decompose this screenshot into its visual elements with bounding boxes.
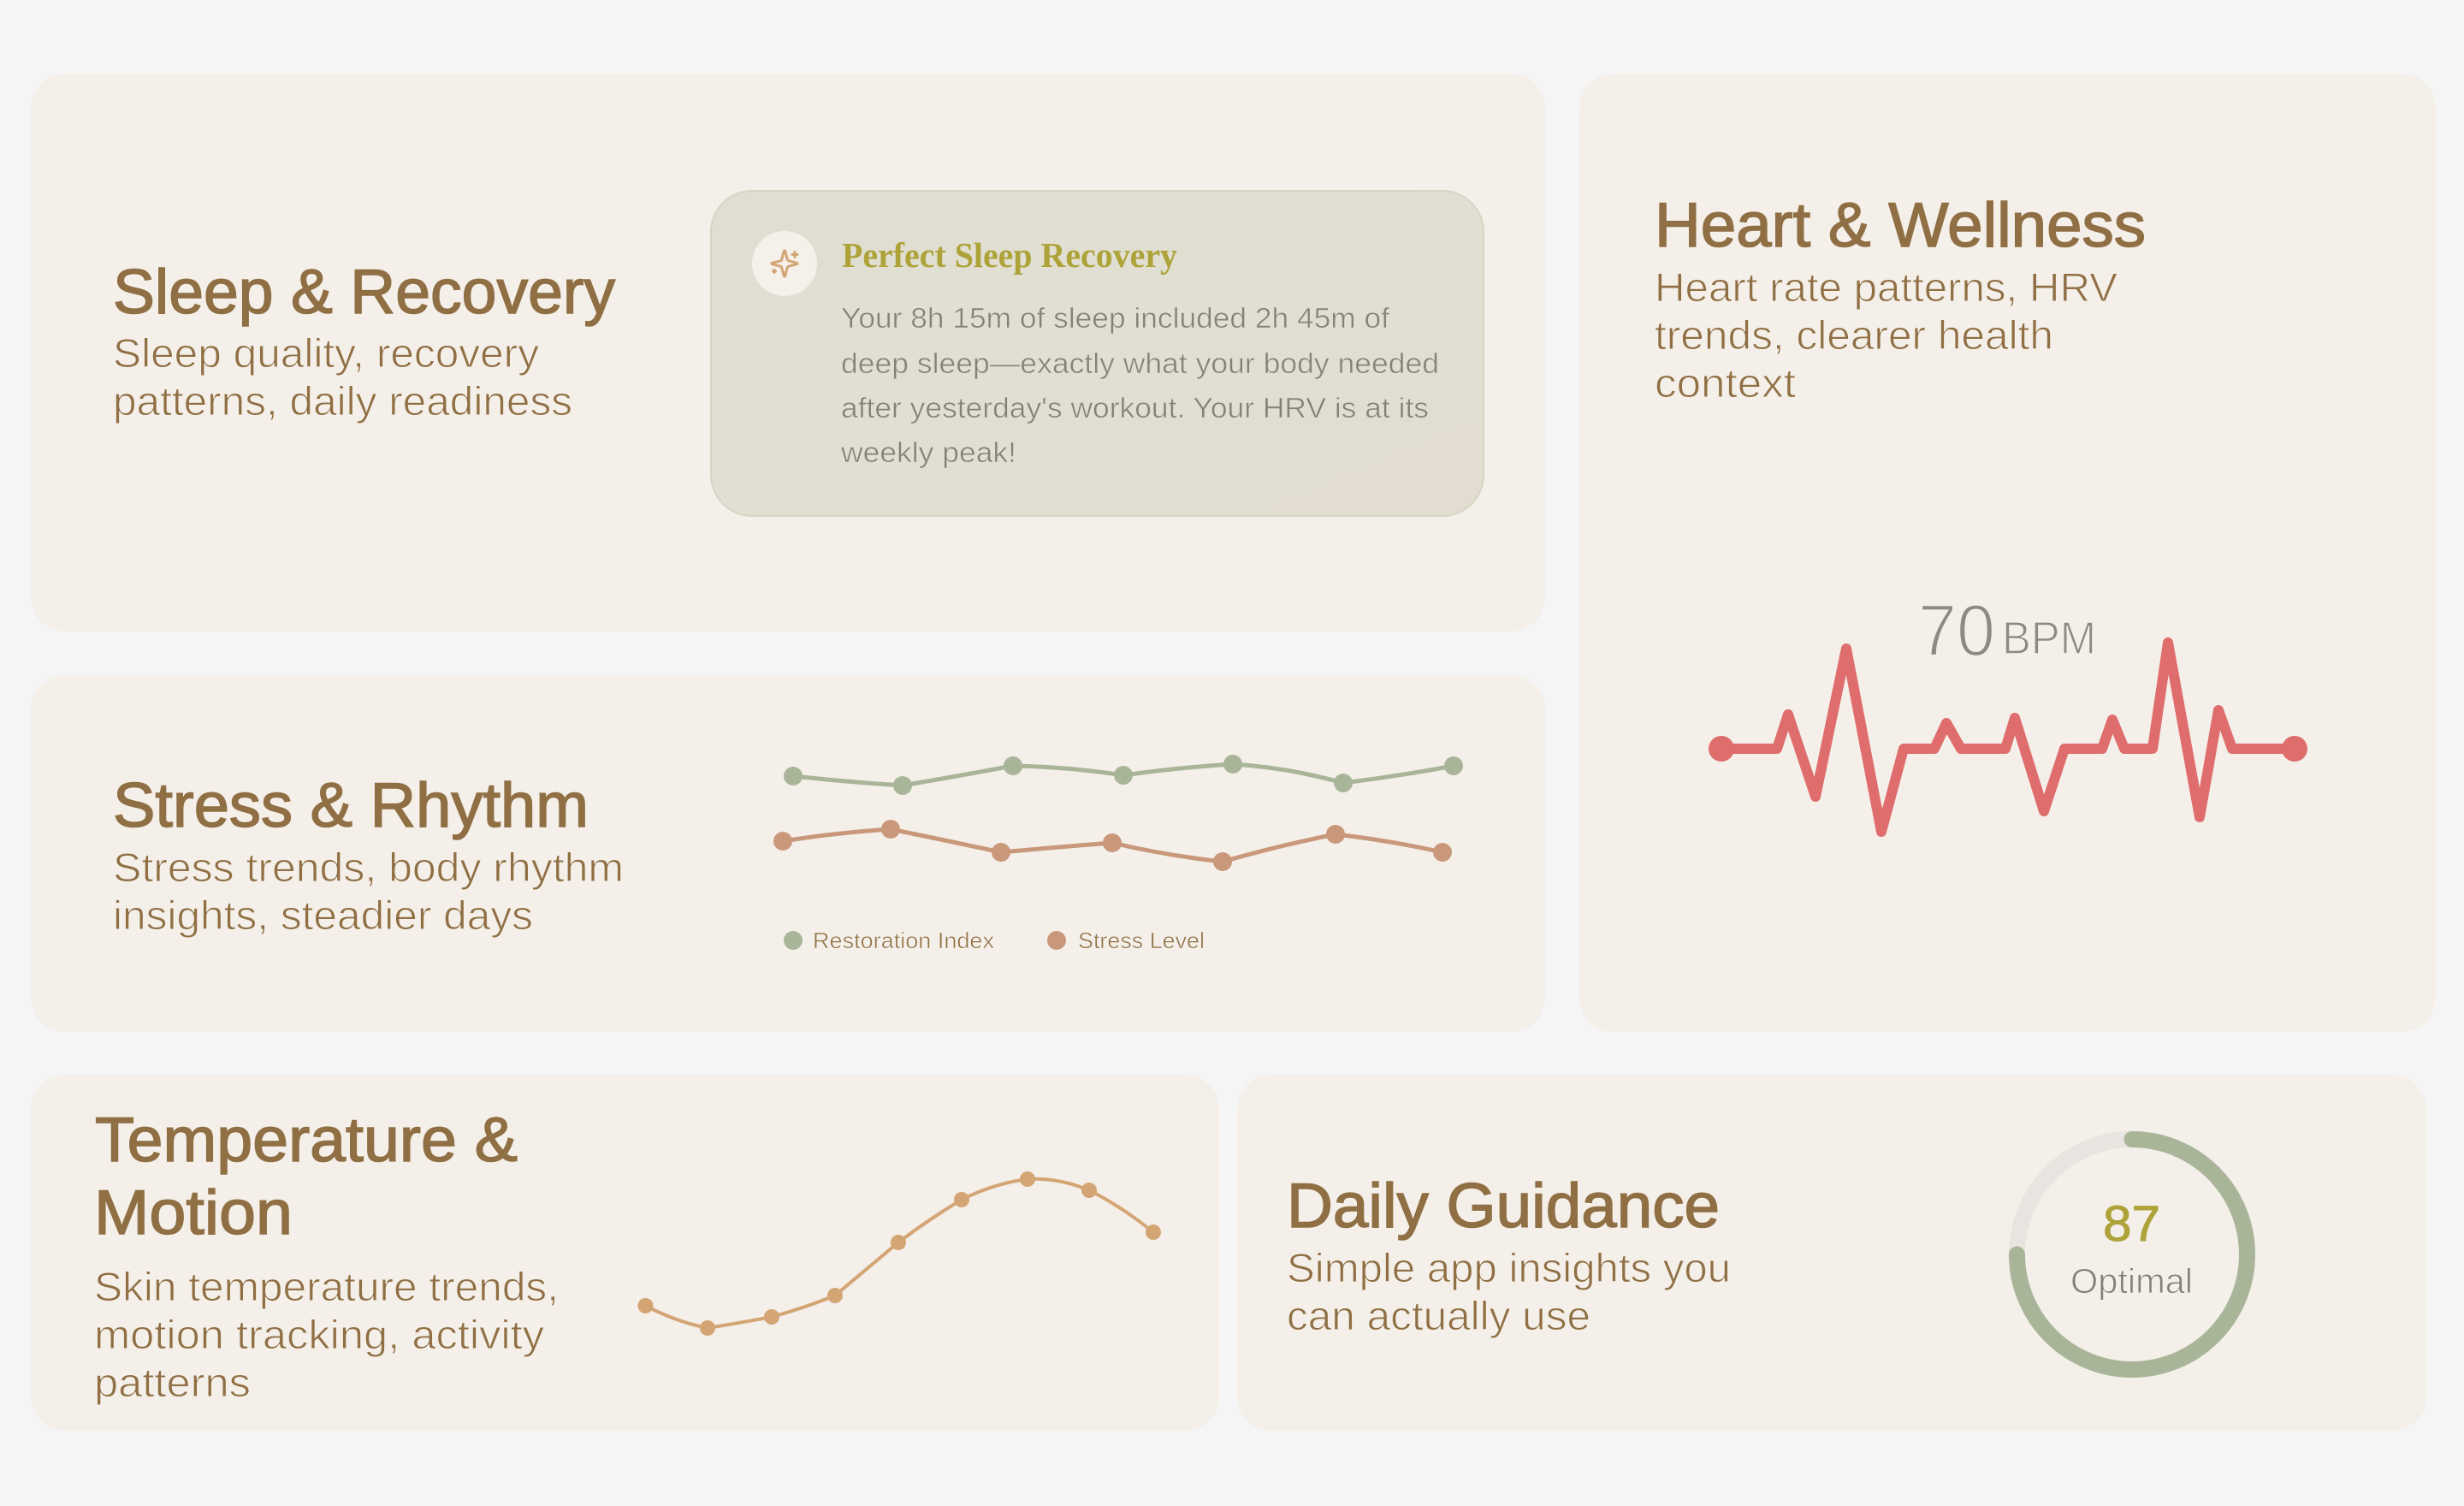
text: daily description: [1287, 1245, 1731, 1338]
callout body text: Your 8h 15m of sleep included 2h 45m of: [841, 302, 1390, 334]
text: temperature description: [94, 1264, 559, 1405]
text: heart description: trends, clearer health: [1655, 312, 2053, 358]
callout body text: weekly peak!: [840, 436, 1016, 468]
heading: heart and wellness: Heart & Wellness: [1655, 191, 2146, 260]
text: temperature description: patterns: [94, 1360, 251, 1405]
text: heart description: Heart rate patterns, HRV: [1655, 264, 2118, 310]
text: daily description: can actually use: [1287, 1293, 1590, 1338]
heading: temperature and motion: Temperature &: [95, 1106, 518, 1175]
chart: heartbeat line: [1709, 643, 2307, 832]
panel: temperature and motion: [31, 1075, 1219, 1431]
text: heart description: context: [1655, 360, 1796, 406]
text: stress description: [113, 845, 624, 938]
heading: sleep and recovery: Sleep & Recovery: [113, 258, 615, 327]
panel: stress and rhythm: [31, 675, 1545, 1032]
text: heart description: [1655, 264, 2118, 406]
line chart: temperature trend: [638, 1171, 1161, 1336]
callout body text: deep sleep—exactly what your body needed: [841, 347, 1439, 379]
text: sleep description: [113, 330, 572, 424]
text: daily description: Simple app insights you: [1287, 1245, 1731, 1290]
heading: temperature and motion: Motion: [94, 1178, 293, 1248]
panel: daily guidance: [1237, 1075, 2426, 1431]
text: stress description: Stress trends, body rhythm: [113, 845, 624, 890]
legend: Stress Level: [1078, 928, 1205, 953]
callout body text: after yesterday's workout. Your HRV is at its: [841, 392, 1429, 424]
metric: 70 BPM: [1918, 590, 2096, 672]
gauge: score ring: [2017, 1140, 2247, 1369]
heading: daily guidance: Daily Guidance: [1287, 1171, 1720, 1241]
text: sleep description: patterns, daily readiness: [113, 378, 572, 424]
text: temperature description: Skin temperature trends,: [94, 1264, 559, 1309]
line chart: restoration index: [784, 755, 1463, 795]
callout title: Perfect Sleep Recovery: [842, 235, 1177, 275]
callout body text: [840, 302, 1439, 468]
text: sleep description: Sleep quality, recovery: [113, 330, 540, 376]
legend: [784, 928, 1205, 953]
panel: sleep and recovery: [31, 74, 1545, 631]
heading: temperature and motion: [94, 1106, 518, 1248]
legend: Restoration Index: [813, 928, 994, 953]
gauge label: Optimal: [2070, 1261, 2193, 1301]
text: temperature description: motion tracking, activity: [94, 1312, 545, 1357]
metric: 70 BPM: BPM: [2002, 613, 2096, 664]
heading: stress and rhythm: Stress & Rhythm: [113, 771, 589, 840]
text: stress description: insights, steadier days: [113, 892, 533, 938]
panel: heart and wellness: [1579, 74, 2436, 1032]
callout: perfect sleep recovery: [711, 191, 1484, 516]
gauge value: 87: [2103, 1196, 2160, 1252]
line chart: stress level: [773, 820, 1452, 871]
metric: 70 BPM: 70: [1918, 590, 1995, 672]
icon: sparkles: [752, 231, 817, 296]
